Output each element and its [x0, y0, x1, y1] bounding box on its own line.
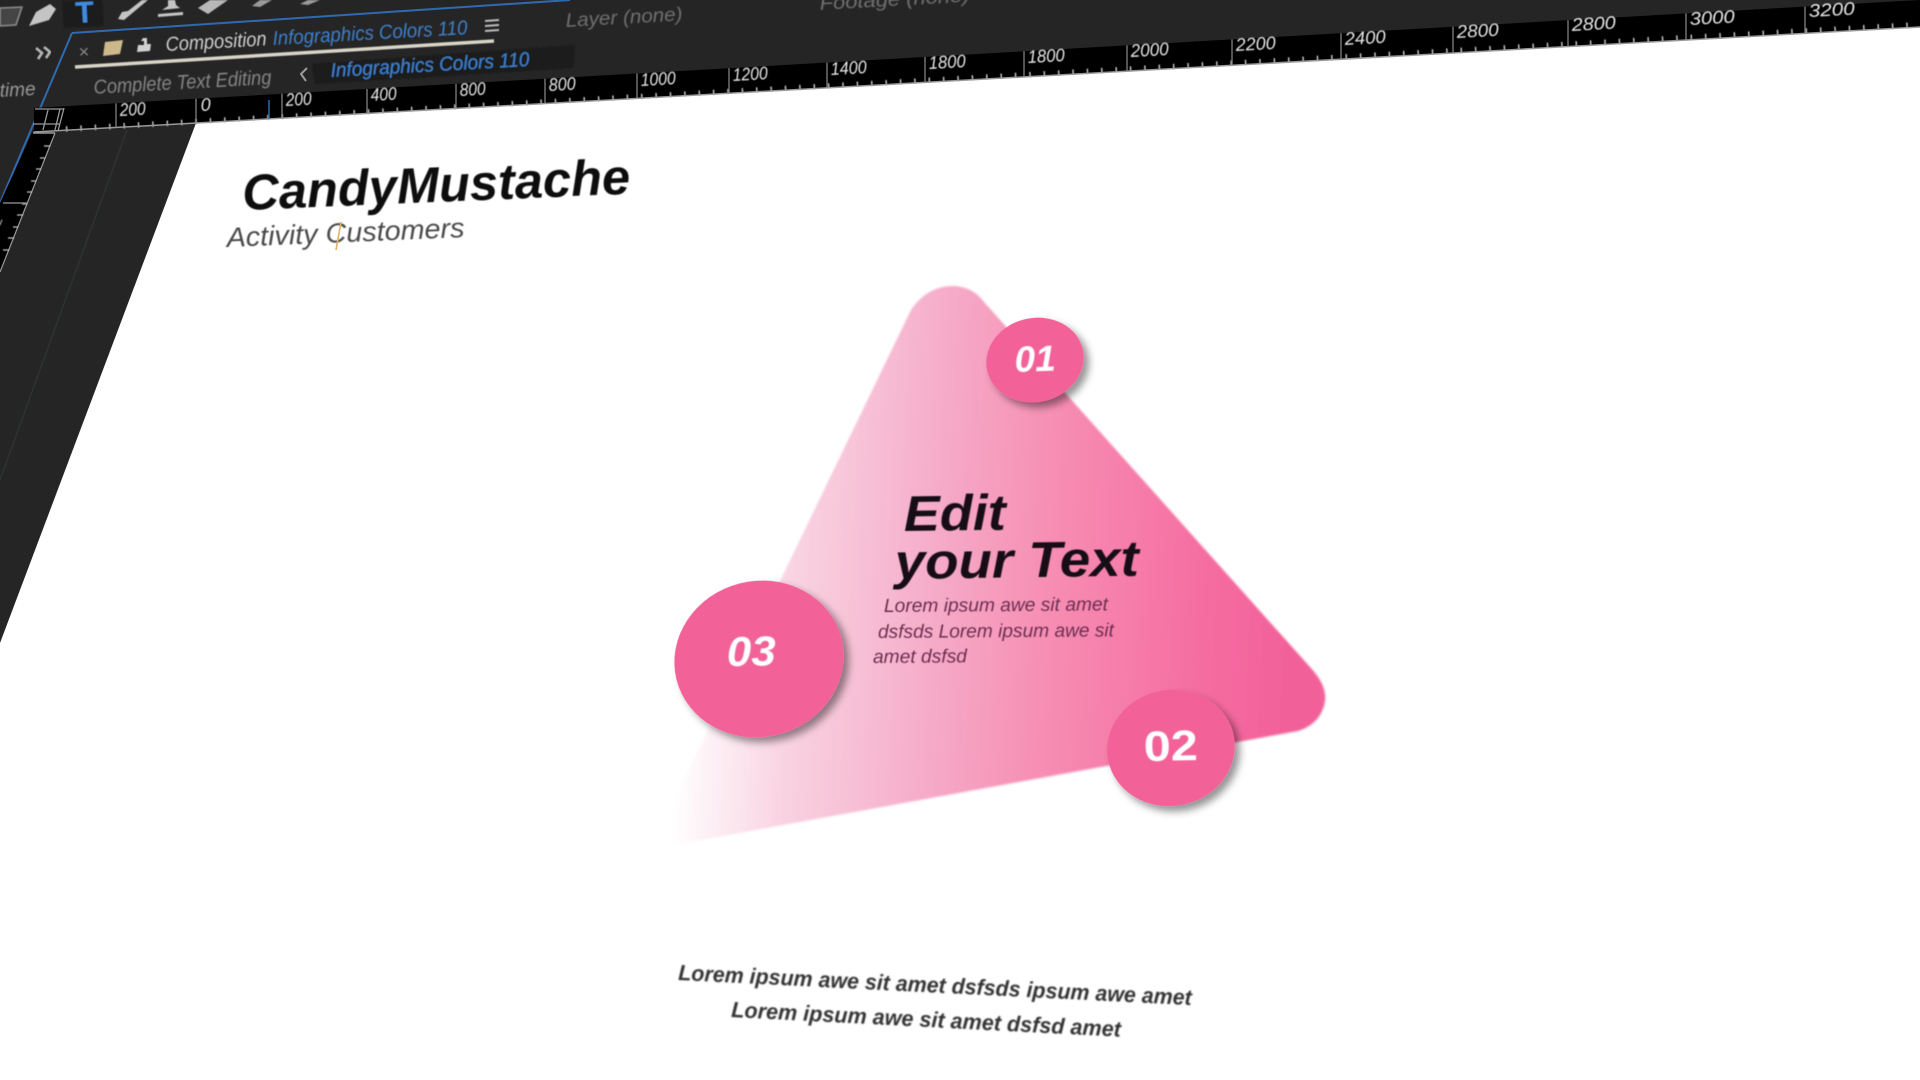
composition tab: [75, 17, 499, 67]
badge 02: [1098, 680, 1244, 816]
brand title: CandyMustache: [241, 149, 631, 221]
timeline label: time: [0, 79, 36, 102]
badge 03: 03: [726, 627, 776, 675]
description text: Lorem ipsum awe sit amet: [884, 594, 1109, 617]
ruler labels: 2800: [1455, 20, 1499, 42]
minor ticks: [66, 24, 1920, 129]
top ruler: [33, 0, 1920, 132]
ruler labels: [118, 0, 1855, 120]
ruler labels: 2400: [1343, 27, 1386, 49]
ruler labels: 800: [548, 74, 576, 95]
triangle diagram: [650, 286, 1325, 850]
badge 01: [978, 309, 1092, 411]
ruler labels: 1800: [928, 51, 966, 73]
ruler labels: 1000: [640, 68, 676, 90]
panel menu glyph: [36, 47, 50, 59]
ruler labels: 1200: [732, 63, 768, 85]
ruler labels: 800: [459, 79, 486, 100]
breadcrumb: active composition: [312, 45, 575, 84]
colour label swatch: [103, 40, 123, 56]
ruler labels: 1400: [830, 57, 867, 79]
lock icon: [137, 38, 151, 52]
heading: Edit: Edit: [903, 485, 1009, 542]
description text: dsfsds Lorem ipsum awe sit: [878, 620, 1115, 643]
composition title: Composition: [165, 28, 267, 56]
layer panel label: Layer (none): [565, 4, 683, 32]
footer text: [678, 960, 1194, 1042]
viewer pasteboard: [0, 123, 196, 643]
breadcrumb: active composition: Infographics Colors 110: [330, 49, 530, 82]
left ruler: [0, 133, 55, 272]
ruler labels: 3000: [1689, 7, 1735, 29]
footer text: Lorem ipsum awe sit amet dsfsds ipsum awe amet: [678, 960, 1194, 1010]
breadcrumb chevron: [301, 68, 307, 81]
active tab underline: [75, 41, 494, 67]
ruler origin box: [33, 108, 64, 131]
close icon: ×: [78, 41, 90, 62]
text cursor: [336, 222, 341, 250]
badge 02: 02: [1143, 722, 1198, 771]
footer text: Lorem ipsum awe sit amet dsfsd amet: [731, 997, 1123, 1042]
ruler labels: 400: [370, 84, 397, 105]
badge 03: [658, 563, 860, 755]
tab menu icon: [485, 20, 499, 31]
breadcrumb: parent composition: Complete Text Editing: [93, 67, 272, 99]
description text: [873, 594, 1115, 668]
toolbar icons: [0, 0, 320, 30]
ruler labels: 200: [284, 89, 312, 110]
brand subtitle: Activity Customers: [224, 212, 465, 253]
ruler labels: 200: [118, 99, 146, 120]
ruler labels: 2800: [1570, 13, 1616, 35]
ruler labels: 2000: [1129, 39, 1169, 61]
composition name: Infographics Colors 110: [272, 17, 468, 50]
ruler labels: 2200: [1234, 33, 1276, 55]
gradient triangle: [650, 286, 1325, 850]
ruler labels: 0: [200, 94, 211, 115]
ruler labels: 1800: [1027, 45, 1065, 67]
panel border lines: [0, 0, 570, 480]
description text: amet dsfsd: [873, 646, 968, 668]
heading: your Text: your Text: [891, 531, 1142, 590]
badge 01: 01: [1014, 338, 1056, 380]
